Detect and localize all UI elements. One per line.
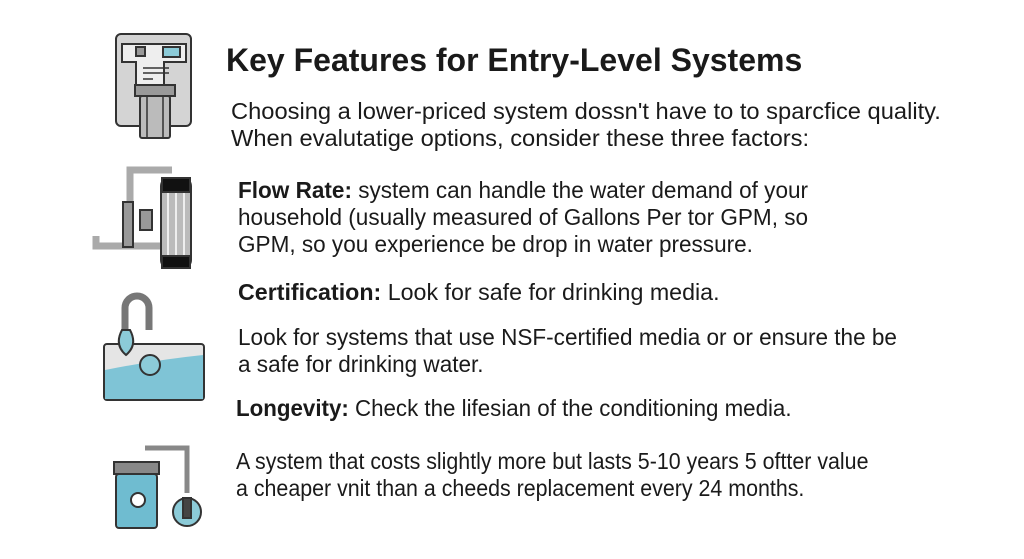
longevity heading: Longevity: Check the lifesian of the conditioning media. (236, 395, 792, 421)
certification text (238, 324, 897, 377)
flow rate text (238, 177, 808, 257)
longevity text: a cheaper vnit than a cheeds replacement every 24 months. (236, 475, 804, 501)
title: Key Features for Entry-Level Systems (226, 42, 802, 78)
intro text: When evalutatige options, consider these three factors: (231, 125, 809, 151)
certification text: Look for systems that use NSF-certified media or or ensure the be (238, 324, 897, 350)
certification heading: Certification: Look for safe for drinking media. (238, 279, 720, 305)
intro text (231, 98, 941, 151)
flow rate text: Flow Rate: system can handle the water demand of your (238, 177, 808, 203)
flow rate text: household (usually measured of Gallons Per tor GPM, so (238, 204, 808, 230)
flow rate text: GPM, so you experience be drop in water pressure. (238, 231, 753, 257)
intro text: Choosing a lower-priced system dossn't have to to sparcfice quality. (231, 98, 941, 124)
longevity text: A system that costs slightly more but lasts 5-10 years 5 oftter value (236, 448, 868, 474)
longevity text (236, 448, 868, 501)
certification text: a safe for drinking water. (238, 351, 484, 377)
